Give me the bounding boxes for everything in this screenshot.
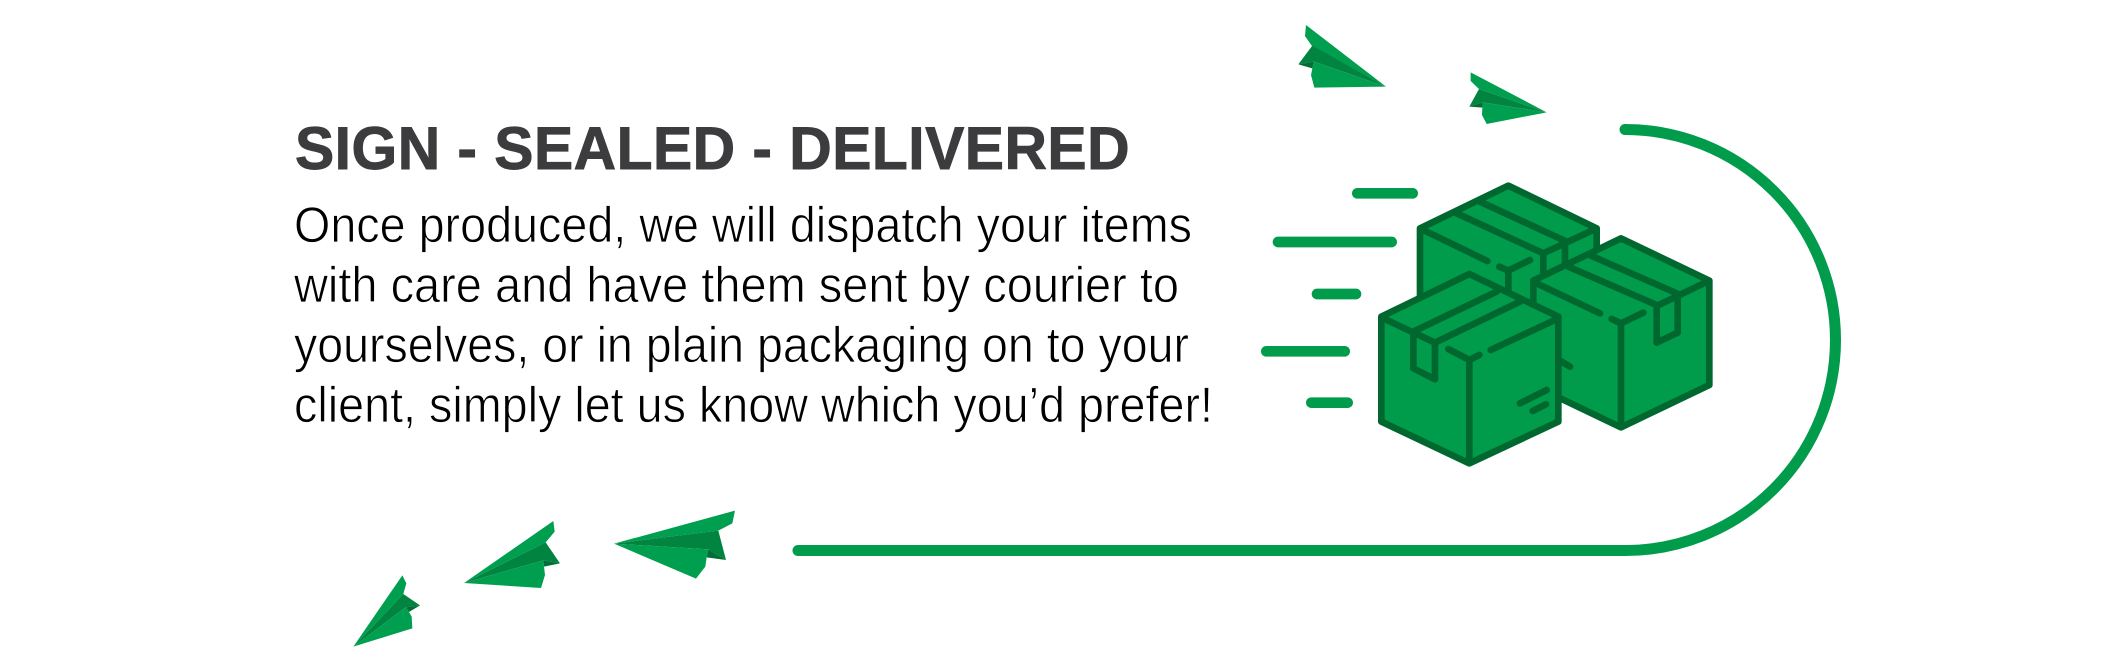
body text: with care and have them sent by courier to (293, 257, 1179, 313)
icon: speed lines (1266, 193, 1413, 403)
icon: stack of boxes (1381, 186, 1709, 463)
curved delivery path (798, 130, 1836, 550)
icon: paper plane bottom middle (464, 521, 560, 588)
body text: yourselves, or in plain packaging on to your (294, 317, 1189, 373)
back box (1420, 186, 1597, 360)
front box (1381, 274, 1558, 463)
right box (1533, 238, 1709, 427)
body text: Once produced, we will dispatch your items (294, 197, 1192, 253)
icon: paper plane top right (1469, 72, 1547, 124)
icon: paper plane top left (1298, 25, 1386, 88)
body text: client, simply let us know which you’d prefer! (294, 377, 1213, 433)
body text (293, 197, 1213, 433)
icon: paper plane bottom right (614, 511, 735, 579)
icon: paper plane bottom left (353, 575, 420, 647)
title: SIGN - SEALED - DELIVERED (295, 115, 1130, 182)
